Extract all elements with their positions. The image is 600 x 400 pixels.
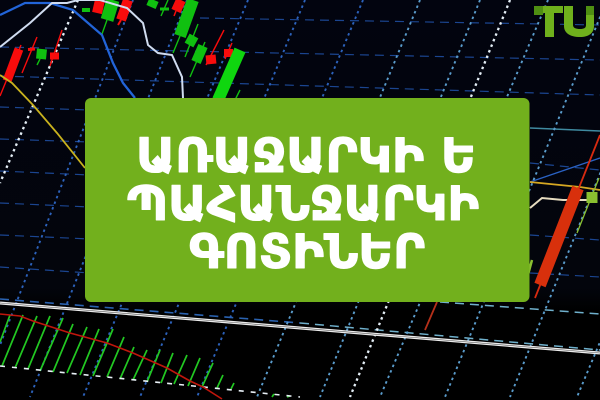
title: ՊԱՀԱՆՋԱՐԿԻ bbox=[127, 177, 479, 232]
right candles bbox=[535, 135, 600, 298]
panel: title card bbox=[85, 98, 530, 302]
title: ԳՈՏԻՆԵՐ bbox=[189, 225, 425, 280]
title: ԱՌԱՋԱՐԿԻ Ե bbox=[136, 129, 476, 184]
candles bbox=[0, 0, 240, 100]
white price line bbox=[0, 303, 600, 353]
logo: TU bbox=[534, 6, 594, 37]
title bbox=[127, 129, 479, 280]
volume bars bbox=[0, 315, 290, 397]
moving average baseline bbox=[0, 366, 300, 397]
indicator lines bbox=[0, 3, 135, 98]
